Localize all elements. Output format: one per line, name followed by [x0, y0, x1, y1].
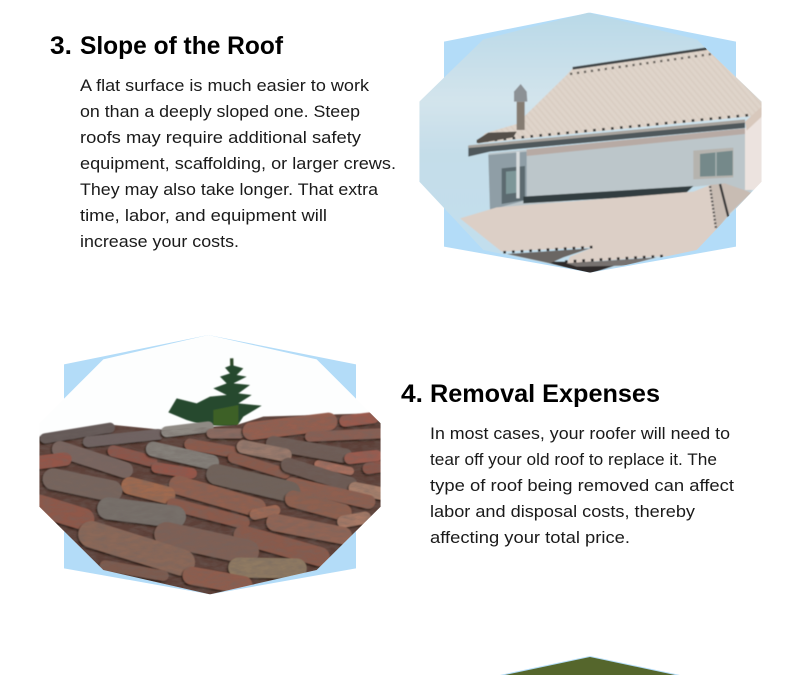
- body text: removal expenses: [430, 424, 734, 547]
- body text: slope of the roof: on than a deeply sloped one. Steep: [80, 102, 360, 121]
- body text: slope of the roof: [80, 76, 396, 251]
- body text: removal expenses: tear off your old roof to replace it. The: [430, 450, 717, 469]
- heading: Slope of the Roof: Slope of the Roof: [80, 32, 284, 60]
- body text: slope of the roof: They may also take longer. That extra: [80, 180, 379, 199]
- heading: Slope of the Roof: 3.: [50, 32, 72, 60]
- photo: house with sloped roof in blue hexagon frame: [420, 12, 762, 273]
- heading: Removal Expenses: 4.: [401, 380, 423, 408]
- heading: Removal Expenses: Removal Expenses: [430, 380, 660, 408]
- mottled grain on tiles: [30, 412, 390, 598]
- section 4: removal expenses text: [401, 380, 734, 547]
- body text: slope of the roof: A flat surface is much easier to work: [80, 76, 370, 95]
- photo: weathered clay roof tiles with pine tree in blue hexagon frame: [39, 335, 381, 594]
- body text: removal expenses: affecting your total price.: [430, 528, 630, 547]
- body text: slope of the roof: increase your costs.: [80, 232, 239, 251]
- body text: slope of the roof: roofs may require additional safety: [80, 128, 362, 147]
- body text: removal expenses: type of roof being removed can affect: [430, 476, 734, 495]
- body text: removal expenses: labor and disposal costs, thereby: [430, 502, 696, 521]
- body text: removal expenses: In most cases, your roofer will need to: [430, 424, 730, 443]
- body text: slope of the roof: equipment, scaffolding, or larger crews.: [80, 154, 396, 173]
- photo: top edge of next section image: [500, 656, 680, 675]
- body text: slope of the roof: time, labor, and equipment will: [80, 206, 327, 225]
- section 3: slope of the roof text: [50, 32, 396, 251]
